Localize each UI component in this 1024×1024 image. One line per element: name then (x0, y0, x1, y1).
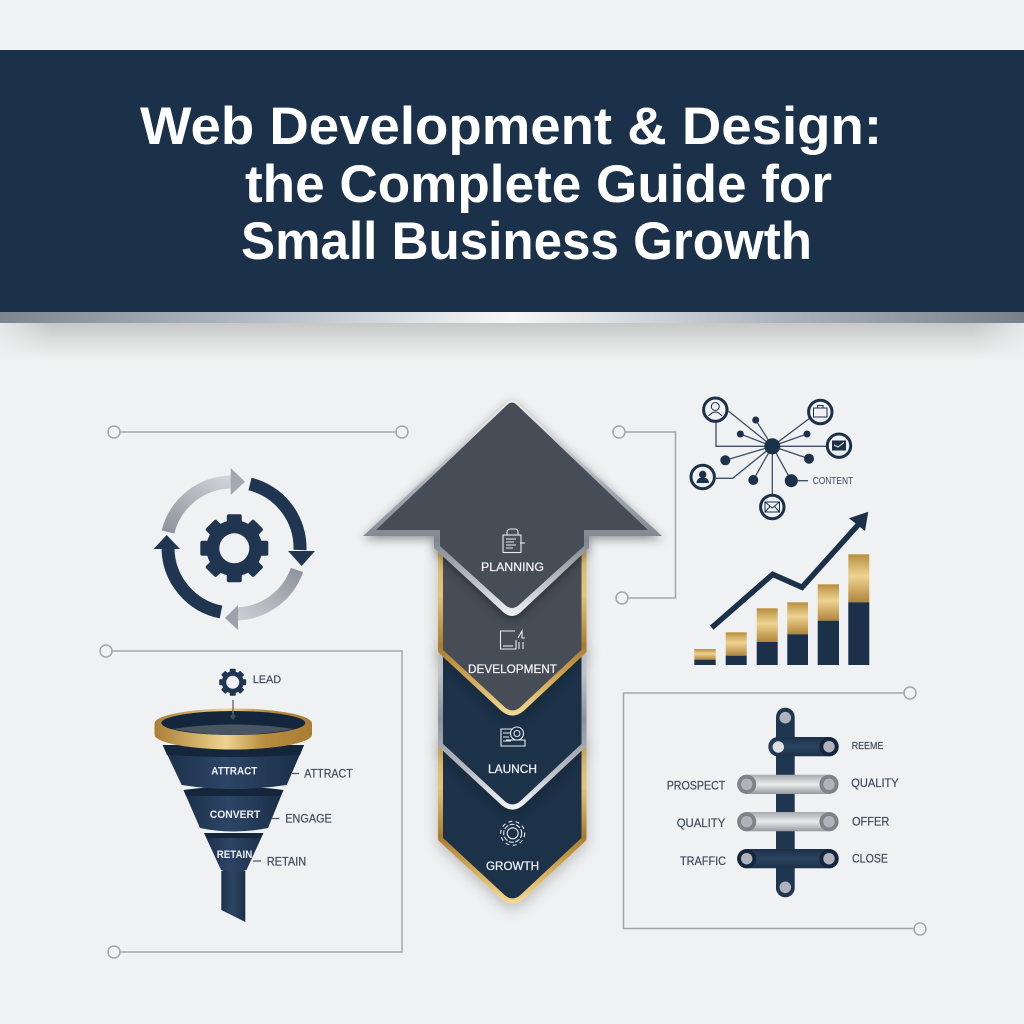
icon: development (500, 631, 525, 649)
funnel (154, 669, 353, 922)
rung: traffic and close (737, 849, 839, 868)
funnel convert tier (184, 786, 284, 832)
label: lead: LEAD (253, 674, 281, 686)
rung: prospect and quality (737, 775, 839, 794)
step: planning arrowhead: PLANNING (481, 560, 544, 574)
icon: person outline (704, 398, 727, 421)
icon: growth gear (501, 821, 525, 845)
connector: ladder frame (624, 687, 926, 935)
ladder labels: OFFER (852, 816, 889, 828)
ladder diagram (667, 708, 899, 897)
rung: quality and offer (737, 812, 839, 831)
growth stack arrow (363, 400, 662, 901)
ladder labels: TRAFFIC (680, 856, 726, 868)
step: launch: LAUNCH (488, 762, 537, 776)
funnel attract tier: ATTRACT (211, 766, 258, 778)
connector: funnel frame (100, 645, 402, 958)
funnel spout (221, 871, 245, 922)
cycle diagram (154, 468, 315, 630)
connector: top right (613, 426, 676, 604)
funnel side labels: ATTRACT (304, 768, 353, 780)
funnel retain tier: RETAIN (217, 849, 252, 861)
ladder labels: PROSPECT (667, 780, 725, 792)
bar chart (694, 512, 869, 665)
funnel side labels: RETAIN (267, 856, 306, 868)
connector: top left (108, 426, 408, 438)
funnel attract tier (163, 745, 304, 789)
network dots (720, 416, 814, 487)
icon: briefcase (809, 400, 832, 424)
ladder labels (667, 740, 899, 868)
icon: gear (200, 514, 268, 582)
icon: lead gear (219, 669, 246, 696)
network diagram (691, 398, 853, 519)
title (140, 97, 882, 271)
ladder labels: CLOSE (852, 853, 888, 865)
step: launch (440, 645, 584, 807)
ladder spine (776, 708, 795, 897)
funnel gold rim (154, 709, 312, 749)
ladder labels: REEME (852, 740, 883, 752)
step: development (440, 545, 584, 713)
trend arrow (712, 512, 868, 628)
ladder labels: QUALITY (677, 818, 726, 830)
funnel retain tier (204, 833, 264, 872)
icon: person solid (691, 465, 714, 489)
icon: envelope (761, 495, 784, 519)
label: content: CONTENT (813, 476, 853, 487)
step: growth: GROWTH (486, 859, 539, 873)
step: planning arrowhead (363, 400, 662, 616)
icon: launch (501, 727, 525, 746)
icon: mail tick (827, 434, 851, 457)
funnel side labels (253, 768, 353, 868)
icon: planning (503, 529, 525, 552)
title: Web Development & Design: (140, 97, 882, 156)
ladder labels: QUALITY (851, 778, 899, 790)
rung: reeme (768, 737, 839, 756)
title: Small Business Growth (241, 212, 812, 271)
network lines (716, 411, 827, 495)
title banner (0, 50, 1024, 361)
spine end caps (780, 712, 791, 893)
step: growth (440, 740, 584, 901)
title: the Complete Guide for (245, 155, 832, 214)
funnel side labels: ENGAGE (285, 813, 332, 825)
step: development: DEVELOPMENT (468, 662, 558, 676)
lead stem (230, 700, 236, 720)
funnel convert tier: CONVERT (210, 809, 261, 821)
